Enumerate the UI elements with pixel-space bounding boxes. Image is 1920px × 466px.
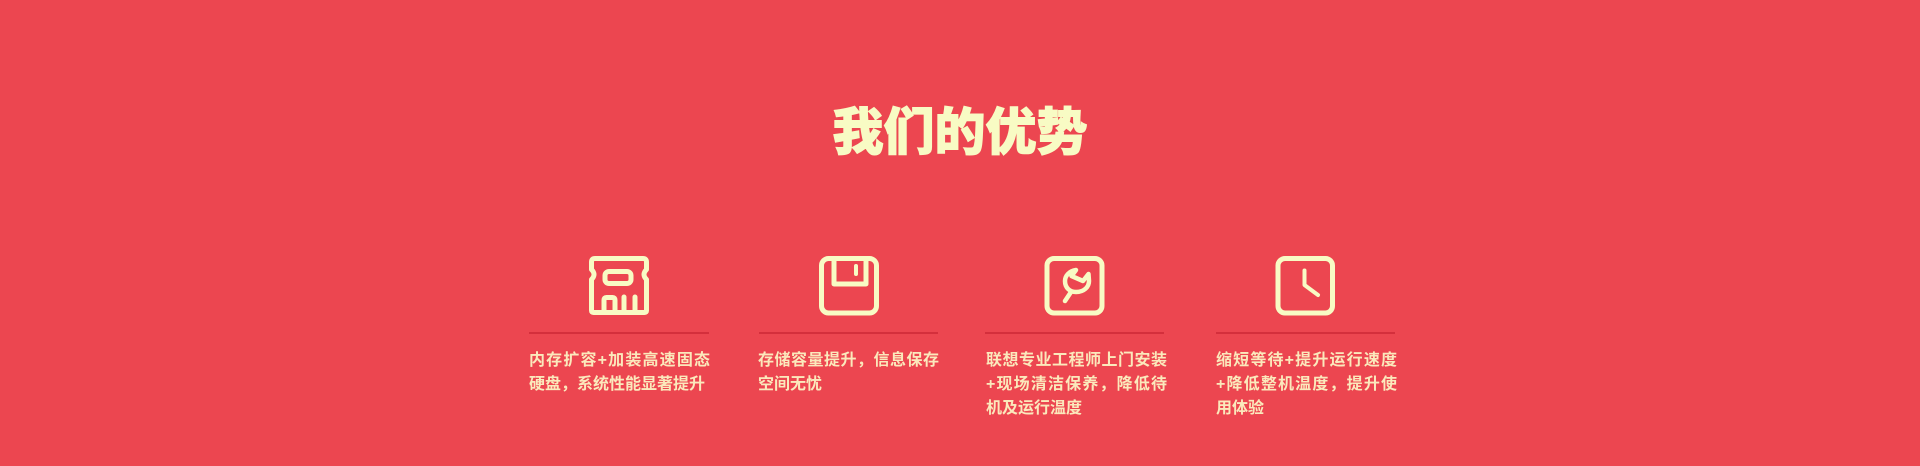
panel: memory expansion	[529, 256, 710, 393]
icon: wrench in square	[1044, 256, 1104, 316]
divider	[759, 332, 938, 334]
divider	[1216, 332, 1395, 334]
panel: engineer service	[985, 256, 1167, 417]
panel: storage capacity	[758, 256, 939, 393]
title: 我们的优势	[832, 104, 1088, 161]
text block: 存储容量提升，信息保存空间无忧	[758, 352, 939, 393]
text block: 缩短等待+提升运行速度+降低整机温度，提升使用体验	[1216, 352, 1397, 417]
divider	[529, 332, 709, 334]
text block: 联想专业工程师上门安装+现场清洁保养，降低待机及运行温度	[986, 352, 1167, 417]
icon: memory chip	[589, 256, 649, 315]
icon: floppy disk	[819, 256, 879, 316]
icon: square clock	[1276, 256, 1335, 316]
divider	[985, 332, 1164, 334]
panel: reduced waiting	[1216, 256, 1397, 417]
text block: 内存扩容+加装高速固态硬盘，系统性能显著提升	[529, 352, 710, 393]
